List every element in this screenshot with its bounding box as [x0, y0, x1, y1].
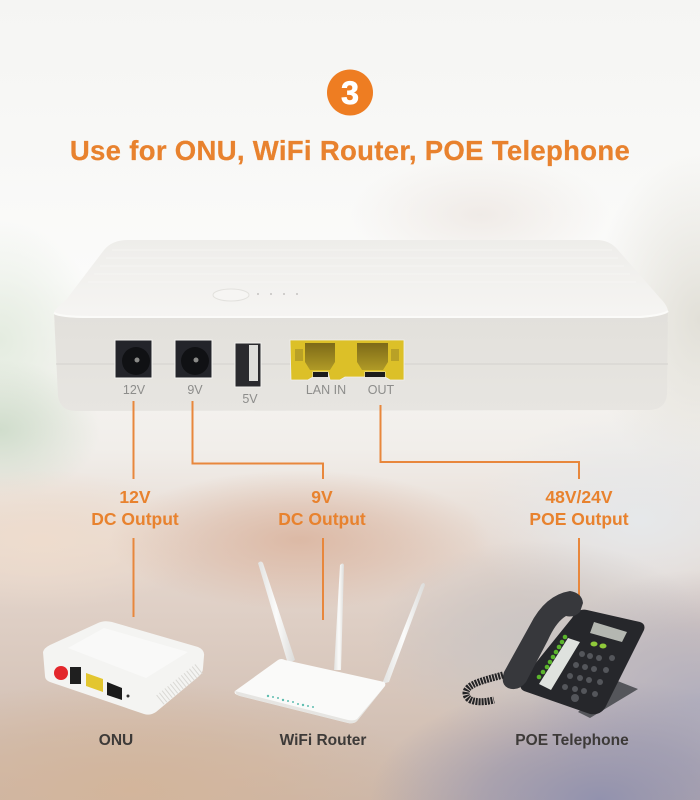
- label: 12V DC Output: DC Output: [91, 509, 179, 529]
- label: 9V DC Output: [278, 487, 366, 529]
- label: 9V DC Output: 9V: [311, 487, 333, 507]
- port labels: [123, 383, 395, 406]
- keypad: [562, 651, 615, 702]
- label: 48V/24V POE Output: 48V/24V: [545, 487, 613, 507]
- key strip: [539, 638, 580, 690]
- soft key buttons: [590, 642, 606, 648]
- title: Use for ONU, WiFi Router, POE Telephone: [70, 135, 630, 166]
- LAN ports: [290, 340, 404, 380]
- connector: 12V to ONU: [132, 401, 134, 617]
- label: 12V DC Output: 12V: [119, 487, 151, 507]
- device top surface: [54, 240, 668, 322]
- connector: 9V to router: [192, 401, 323, 620]
- 9V DC jack: [175, 340, 212, 378]
- display: [590, 622, 627, 642]
- label: 48V/24V POE Output: POE Output: [529, 509, 629, 529]
- phone stand: [578, 680, 638, 718]
- image: ONU device: [43, 621, 204, 715]
- 12V DC jack: [115, 340, 152, 378]
- label: 12V DC Output: [91, 487, 179, 529]
- label: 48V/24V POE Output: [529, 487, 629, 529]
- power button and LEDs: [213, 289, 298, 301]
- device front face: [54, 311, 668, 411]
- port labels: 9V: [187, 383, 203, 397]
- label: ONU: ONU: [99, 732, 133, 749]
- coiled cord: [466, 675, 503, 702]
- port labels: LAN IN: [306, 383, 346, 397]
- connector: OUT to telephone: [380, 405, 579, 597]
- label: WiFi Router: WiFi Router: [280, 732, 366, 749]
- step number badge: 3: [341, 75, 359, 111]
- label: 9V DC Output: DC Output: [278, 509, 366, 529]
- 5V USB port: [235, 343, 261, 387]
- port labels: 5V: [242, 392, 258, 406]
- label: POE Telephone: POE Telephone: [515, 732, 629, 749]
- phone body: [520, 610, 644, 714]
- image: POE telephone: [466, 591, 644, 718]
- handset: [503, 591, 583, 689]
- device: power supply: [54, 240, 668, 411]
- port labels: OUT: [368, 383, 395, 397]
- step number badge: [327, 70, 373, 116]
- image: WiFi router: [235, 562, 425, 723]
- port labels: 12V: [123, 383, 146, 397]
